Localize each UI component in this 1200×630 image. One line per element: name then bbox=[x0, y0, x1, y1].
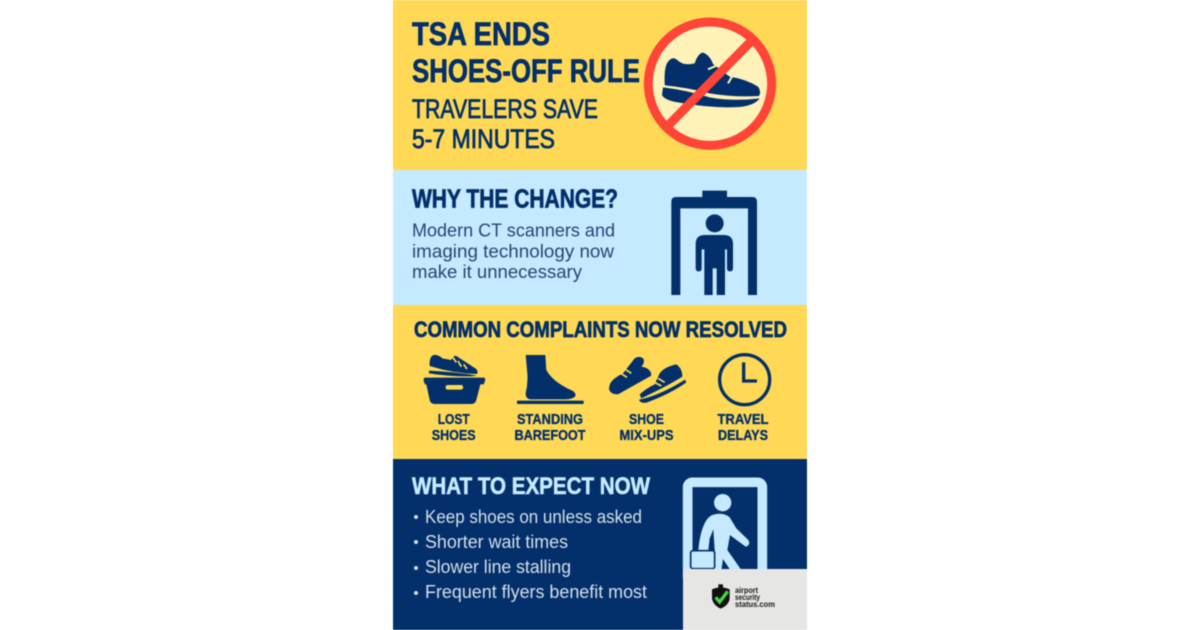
label bbox=[432, 411, 476, 444]
heading: WHAT TO EXPECT NOW bbox=[412, 473, 651, 500]
bullet list: Frequent flyers benefit most bbox=[425, 582, 647, 602]
label: SHOE bbox=[629, 411, 664, 428]
label: SHOES bbox=[432, 427, 476, 444]
label bbox=[514, 411, 586, 444]
icon: body scanner bbox=[671, 191, 757, 295]
text block: make it unnecessary bbox=[412, 262, 582, 282]
icon: shoe in bin bbox=[424, 355, 485, 404]
subtitle: TRAVELERS SAVE bbox=[412, 94, 598, 124]
icon: shield logo bbox=[712, 584, 730, 609]
logo text bbox=[735, 586, 775, 609]
text block: Modern CT scanners and bbox=[412, 220, 615, 240]
text block: imaging technology now bbox=[412, 242, 615, 262]
item: standing barefoot bbox=[514, 355, 586, 444]
panel: why the change bbox=[393, 170, 807, 305]
label: MIX-UPS bbox=[620, 427, 674, 444]
subtitle: 5-7 MINUTES bbox=[412, 124, 555, 154]
label: STANDING bbox=[517, 411, 583, 428]
logo text: status.com bbox=[735, 600, 775, 609]
heading: WHY THE CHANGE? bbox=[412, 186, 618, 214]
logo text: airport bbox=[735, 586, 758, 595]
label: LOST bbox=[438, 411, 470, 428]
bullet list: Shorter wait times bbox=[425, 532, 568, 552]
panel: headline bbox=[393, 0, 807, 170]
heading: COMMON COMPLAINTS NOW RESOLVED bbox=[414, 317, 787, 342]
label: TRAVEL bbox=[718, 411, 768, 428]
panel: what to expect bbox=[393, 459, 807, 630]
bullet list bbox=[414, 507, 647, 602]
icon: clock bbox=[720, 355, 770, 405]
title bbox=[412, 16, 640, 89]
panel: common complaints bbox=[393, 305, 807, 459]
item: lost shoes bbox=[424, 355, 485, 444]
label: DELAYS bbox=[718, 427, 768, 444]
label bbox=[718, 411, 768, 444]
icon: bare foot bbox=[517, 355, 584, 404]
bullet list: Keep shoes on unless asked bbox=[425, 507, 642, 527]
item: travel delays bbox=[718, 355, 770, 444]
label bbox=[620, 411, 674, 444]
title: SHOES-OFF RULE bbox=[412, 53, 640, 89]
text block bbox=[412, 220, 615, 282]
logo text: security bbox=[735, 593, 760, 602]
bullet list: Slower line stalling bbox=[425, 557, 571, 577]
subtitle bbox=[412, 94, 598, 154]
icon: prohibited shoe bbox=[648, 22, 772, 145]
label: BAREFOOT bbox=[514, 427, 586, 444]
title: TSA ENDS bbox=[412, 16, 550, 52]
icon: mismatched shoes bbox=[609, 357, 686, 403]
icon: person walking through door bbox=[688, 482, 762, 582]
logo box bbox=[683, 569, 807, 630]
item: shoe mix-ups bbox=[609, 357, 686, 444]
